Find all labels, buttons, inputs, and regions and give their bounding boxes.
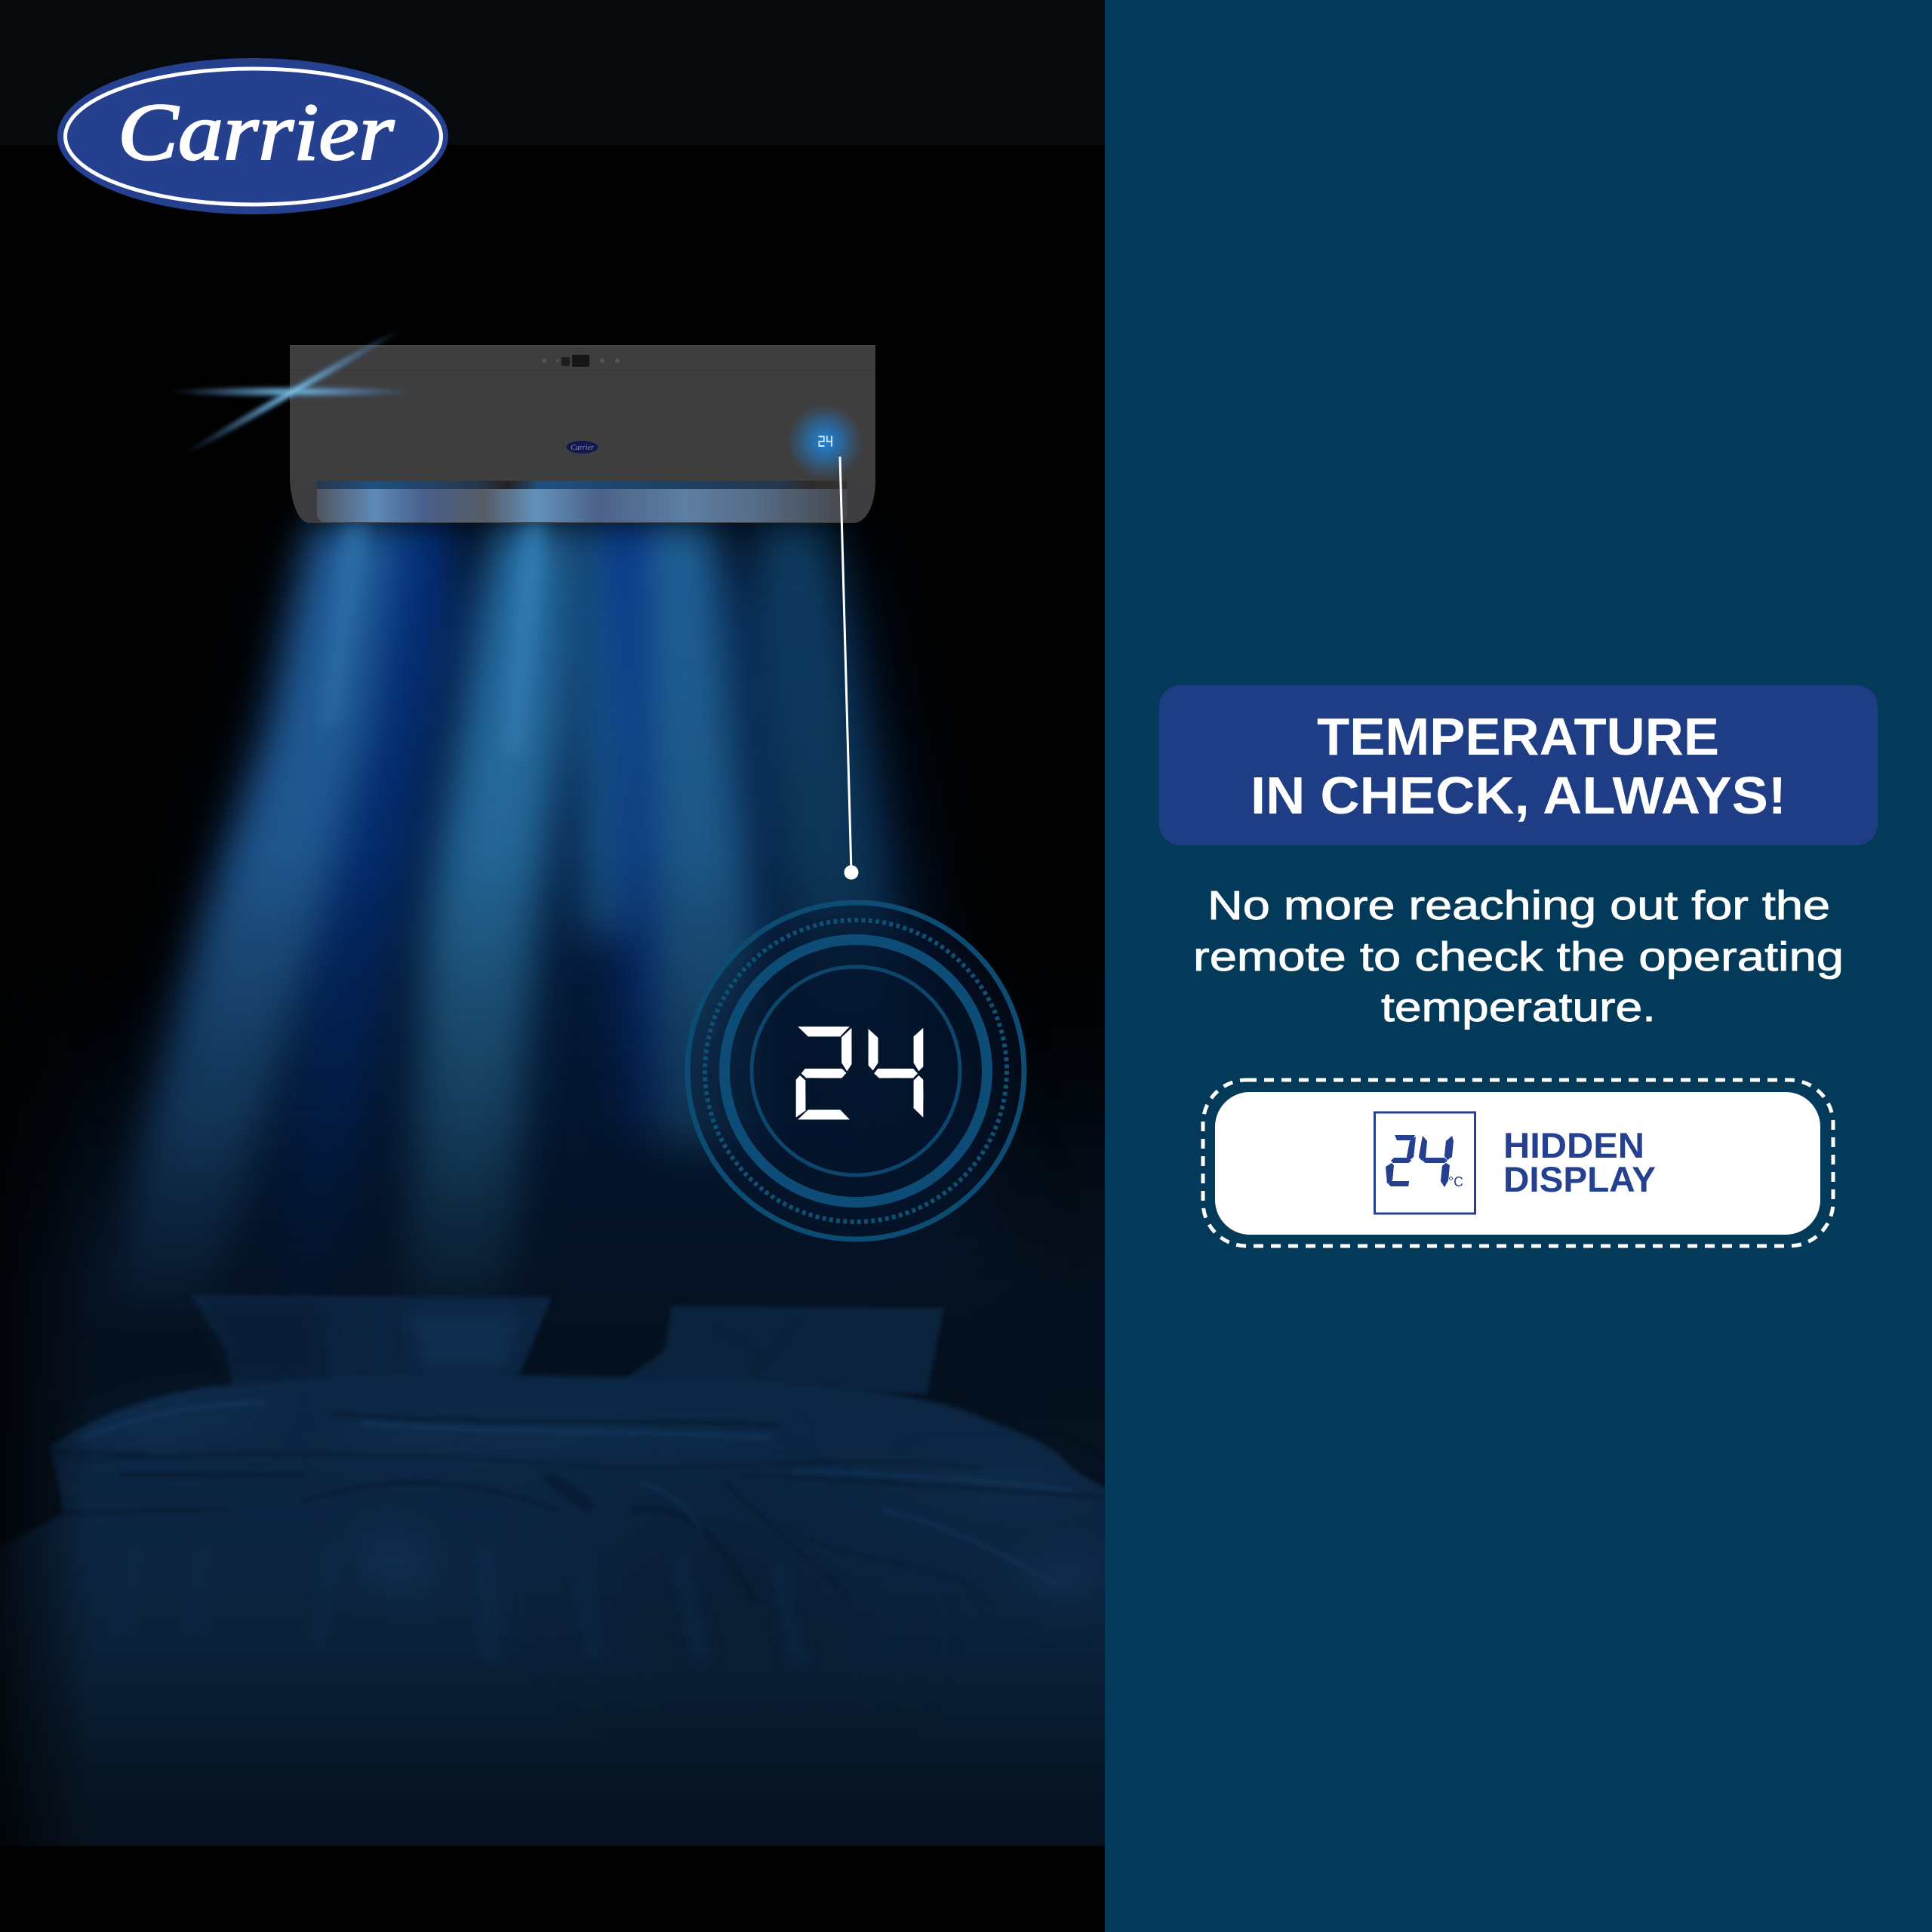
air conditioner unit [290, 345, 875, 523]
panel: night room scene [0, 0, 1132, 1932]
icon: 24 degree display: 24 [1384, 1126, 1455, 1201]
icon: 24 degree display: °C [1448, 1174, 1463, 1189]
badge: hidden display [1203, 1080, 1833, 1246]
mini logo: Carrier [571, 444, 594, 452]
control panel [542, 355, 620, 367]
temperature display glow: 24 [817, 435, 833, 450]
logo: Carrier [57, 58, 448, 214]
panel: feature description [1105, 0, 1932, 1932]
edge vignette [0, 1081, 75, 1846]
air vent [317, 481, 848, 522]
heading: IN CHECK, ALWAYS! [1251, 766, 1786, 825]
icon: 24 degree display [1375, 1112, 1475, 1214]
body text: No more reaching out for the [1208, 883, 1830, 928]
badge label [1503, 1126, 1656, 1200]
body text [1193, 883, 1844, 1030]
mini logo [566, 441, 598, 454]
badge label: DISPLAY [1503, 1160, 1656, 1200]
light flare [168, 322, 417, 461]
body text: temperature. [1381, 985, 1656, 1030]
bed: duvet [0, 1374, 1105, 1846]
logo: Carrier: Carrier [118, 88, 395, 177]
cool air beams [91, 524, 1011, 1358]
badge label: HIDDEN [1503, 1126, 1644, 1166]
heading [1159, 685, 1878, 845]
heading: TEMPERATURE [1317, 707, 1719, 766]
dial number 24: 24 [792, 1004, 927, 1148]
callout line [840, 457, 859, 880]
room ambient glow [0, 1035, 1105, 1544]
bed: pillows [191, 1295, 944, 1395]
body text: remote to check the operating [1193, 934, 1844, 980]
temperature display glow [789, 406, 860, 477]
temperature dial [685, 900, 1026, 1241]
